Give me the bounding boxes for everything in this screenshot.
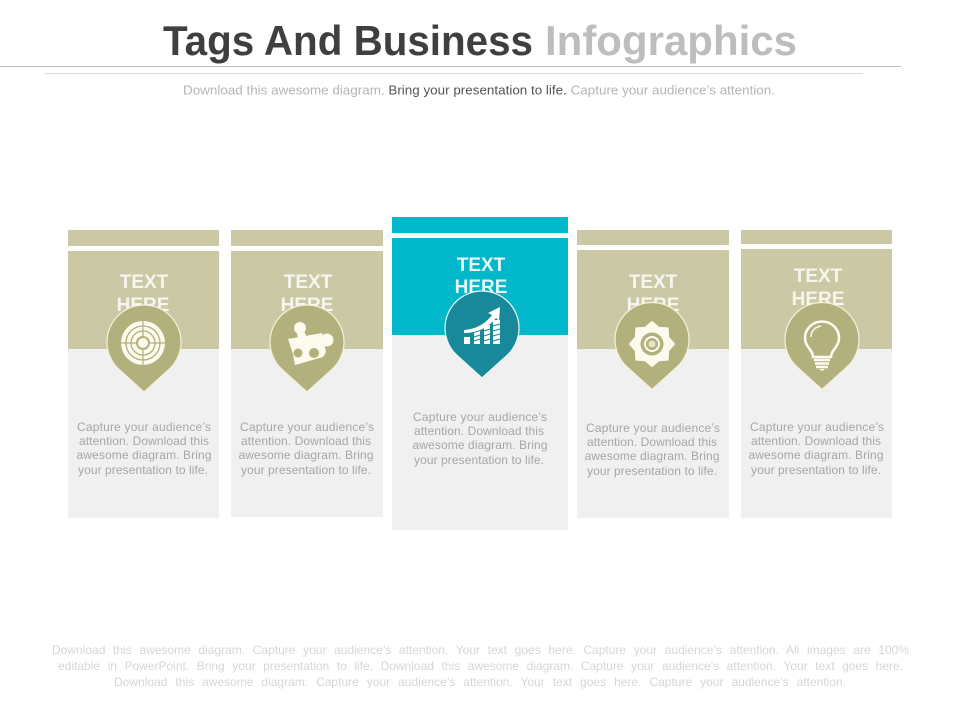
body text 1: awesome diagram. Bring — [76, 448, 212, 462]
icon: puzzle piece — [288, 322, 334, 365]
body text 4: your presentation to life. — [587, 464, 717, 478]
panel: tag 2 puzzle: HERE — [281, 295, 333, 316]
panel: tag 3 growth chart: TEXT — [457, 255, 506, 276]
panel: tag 5 light bulb: HERE — [792, 289, 844, 310]
icon: growth chart — [464, 307, 500, 344]
body text 4 — [584, 421, 720, 478]
footer text: editable in PowerPoint. Bring your presentation to life. Download this awesome diagram. Capture your audience’s attention. Your text goes here. — [58, 659, 903, 673]
panel: tag 5 light bulb — [741, 230, 892, 518]
body text 1 — [76, 420, 212, 477]
icon: light bulb — [805, 322, 839, 371]
body text 3: attention. Download this — [414, 424, 544, 438]
title: Infographics — [545, 17, 797, 64]
body text 4: attention. Download this — [587, 435, 717, 449]
body text 1: your presentation to life. — [78, 463, 208, 477]
footer text: Download this awesome diagram. Capture your audience’s attention. Your text goes here. Capture your audience’s attention. — [114, 675, 846, 689]
panel: tag 1 target: HERE — [117, 295, 169, 316]
title: Tags And Business — [163, 17, 533, 64]
panel: tag 4 gear: TEXT — [629, 272, 678, 293]
panel: tag 1 target — [68, 230, 219, 518]
panel: tag 4 gear: HERE — [627, 295, 679, 316]
body text 5: awesome diagram. Bring — [748, 448, 884, 462]
body text 5: Capture your audience’s — [750, 420, 884, 434]
body text 3: your presentation to life. — [414, 453, 544, 467]
panel: tag 2 puzzle: TEXT — [284, 272, 333, 293]
subtitle: Download this awesome diagram. Bring your presentation to life. Capture your audience’s attention. — [183, 84, 775, 98]
panel: tag 2 puzzle — [231, 230, 383, 517]
body text 5 — [748, 420, 884, 477]
body text 4: Capture your audience’s — [586, 421, 720, 435]
footer text: Download this awesome diagram. Capture your audience’s attention. Your text goes here. Capture your audience’s attention. All images are 100% — [52, 643, 909, 657]
body text 2 — [238, 420, 374, 477]
panel: tag 3 growth chart: HERE — [455, 277, 507, 298]
title — [163, 17, 797, 64]
panel: tag 1 target: TEXT — [120, 272, 169, 293]
body text 2: your presentation to life. — [241, 463, 371, 477]
body text 1: attention. Download this — [79, 434, 209, 448]
body text 5: your presentation to life. — [751, 463, 881, 477]
icon: gear — [630, 322, 674, 366]
body text 3: awesome diagram. Bring — [412, 438, 548, 452]
panel: tag 3 growth chart — [392, 217, 568, 530]
icon: target — [120, 320, 166, 366]
body text 5: attention. Download this — [751, 434, 881, 448]
footer text — [52, 643, 909, 689]
body text 4: awesome diagram. Bring — [584, 449, 720, 463]
body text 2: Capture your audience’s — [240, 420, 374, 434]
body text 3: Capture your audience’s — [413, 410, 547, 424]
panel: tag 5 light bulb: TEXT — [794, 266, 843, 287]
body text 1: Capture your audience’s — [77, 420, 211, 434]
body text 3 — [412, 410, 548, 467]
panel: tag 4 gear — [577, 230, 729, 518]
body text 2: awesome diagram. Bring — [238, 448, 374, 462]
body text 2: attention. Download this — [241, 434, 371, 448]
